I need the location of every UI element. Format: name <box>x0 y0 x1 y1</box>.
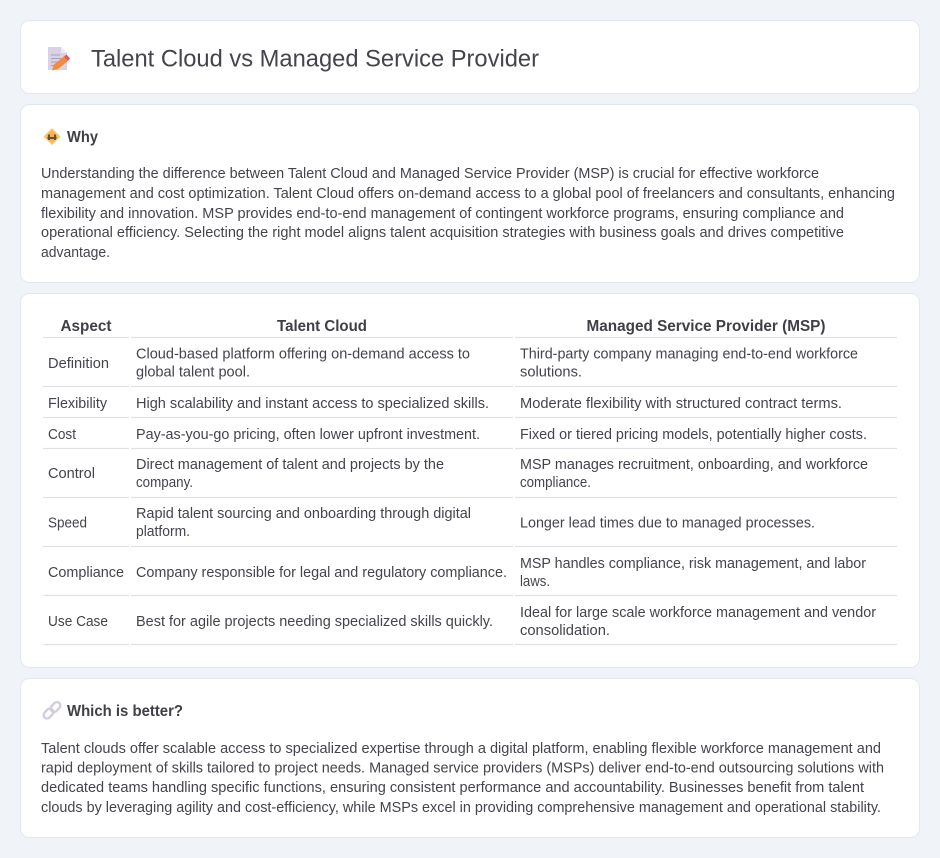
text block: why paragraph <box>41 166 895 261</box>
row: control: compliance. <box>520 475 591 491</box>
row: definition <box>48 346 858 380</box>
text block: why paragraph: management and cost optimization. Talent Cloud offers on-demand access to a global pool of freelancers and consultants, enhancing <box>41 186 895 202</box>
text block: why paragraph: Understanding the difference between Talent Cloud and Managed Service Provider (MSP) is crucial for effective workforce <box>41 166 819 182</box>
panel: comparison table <box>20 294 920 668</box>
row: compliance: Compliance <box>48 565 124 581</box>
row: use case: Ideal for large scale workforce management and vendor <box>520 605 876 621</box>
row: definition: Definition <box>48 356 109 372</box>
row: speed: platform. <box>136 524 190 540</box>
panel: why <box>20 104 920 282</box>
table header: Talent Cloud <box>277 318 367 335</box>
row: speed <box>48 506 815 540</box>
panel: which is better <box>20 678 920 838</box>
icon: diamond sign <box>44 129 60 144</box>
row: use case: Best for agile projects needing specialized skills quickly. <box>136 614 493 630</box>
row: definition: solutions. <box>520 364 582 380</box>
icon: chain link <box>42 701 62 720</box>
row: cost: Pay-as-you-go pricing, often lower upfront investment. <box>136 427 480 443</box>
row: flexibility: High scalability and instant access to specialized skills. <box>136 396 489 412</box>
row: cost <box>48 427 867 443</box>
panel: title card <box>20 20 920 94</box>
table header <box>60 318 826 335</box>
row: control <box>48 457 868 491</box>
text block: which is better paragraph: rapid deployment of skills tailored to project needs. Managed service providers (MSPs) deliver end-to-end outsourcing solutions with <box>41 760 884 776</box>
row: cost: Cost <box>48 427 76 443</box>
row: control: company. <box>136 475 193 491</box>
text block: why paragraph: advantage. <box>41 245 110 261</box>
row: flexibility <box>48 396 842 412</box>
row: definition: Third-party company managing end-to-end workforce <box>520 346 858 362</box>
heading: which is better: Which is better? <box>67 703 183 720</box>
row: use case: Use Case <box>48 614 108 630</box>
text block: which is better paragraph: Talent clouds offer scalable access to specialized expertise through a digital platform, enabling flexible workforce management and <box>41 741 881 757</box>
icon: document with pencil <box>48 47 70 70</box>
text block: why paragraph: flexibility and innovation. MSP provides end-to-end management of contingent workforce programs, ensuring compliance and <box>41 206 844 222</box>
row: flexibility: Moderate flexibility with structured contract terms. <box>520 396 842 412</box>
row: use case: consolidation. <box>520 623 610 639</box>
text block: which is better paragraph <box>41 741 884 816</box>
text block: which is better paragraph: dedicated teams handling specific functions, ensuring consistent performance and accountability. Businesses benefit from talent <box>41 780 864 796</box>
row: definition: global talent pool. <box>136 364 250 380</box>
table header: Aspect <box>60 318 112 335</box>
row: compliance: Company responsible for legal and regulatory compliance. <box>136 565 507 581</box>
row: compliance: laws. <box>520 574 550 590</box>
row: cost: Fixed or tiered pricing models, potentially higher costs. <box>520 427 867 443</box>
row: control: Control <box>48 466 95 482</box>
title: Talent Cloud vs Managed Service Provider <box>91 46 539 72</box>
row: speed: Speed <box>48 516 87 532</box>
row: use case <box>48 605 876 639</box>
table header: Managed Service Provider (MSP) <box>586 318 826 335</box>
row: control: MSP manages recruitment, onboarding, and workforce <box>520 457 868 473</box>
row: compliance <box>48 556 866 590</box>
row: control: Direct management of talent and projects by the <box>136 457 444 473</box>
row: definition: Cloud-based platform offering on-demand access to <box>136 346 470 362</box>
row: speed: Rapid talent sourcing and onboarding through digital <box>136 506 471 522</box>
row: speed: Longer lead times due to managed processes. <box>520 516 815 532</box>
text block: why paragraph: operational efficiency. Selecting the right model aligns talent acquisition strategies with business goals and drives competitive <box>41 225 844 241</box>
heading: why: Why <box>67 129 98 146</box>
row: flexibility: Flexibility <box>48 396 108 412</box>
row: compliance: MSP handles compliance, risk management, and labor <box>520 556 866 572</box>
text block: which is better paragraph: clouds by leveraging agility and cost-efficiency, while MSPs excel in providing comprehensive management and operational stability. <box>41 800 881 816</box>
